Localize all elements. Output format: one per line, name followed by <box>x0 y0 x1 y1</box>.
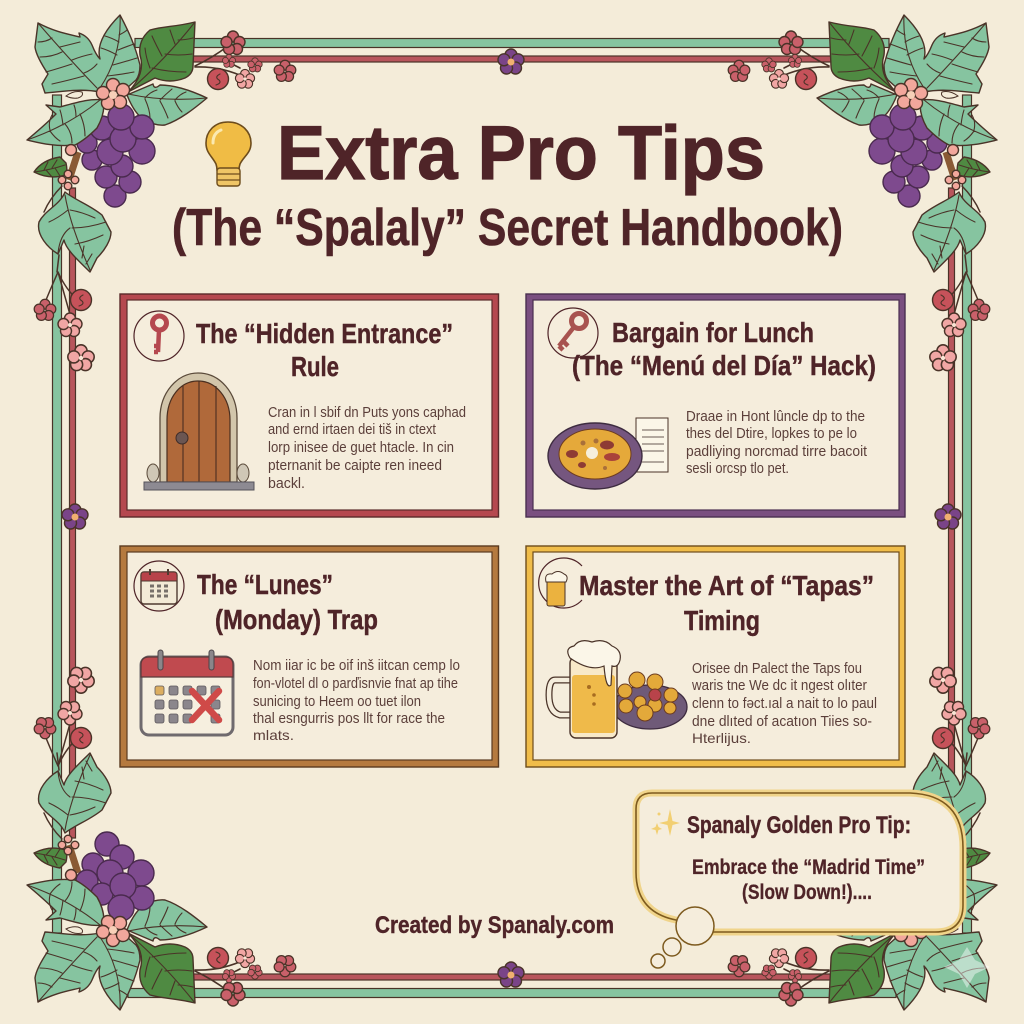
body text: Orisee dn Palect the Taps fou <box>692 660 862 677</box>
panel: tapas timing: Timing <box>684 605 760 636</box>
body text: padliying norcmad tirre bacoit <box>686 443 868 460</box>
title: Extra Pro Tips <box>277 111 765 196</box>
body text: thes del Dtire, lopkes to pe lo <box>686 425 857 442</box>
sparkle watermark <box>944 947 990 988</box>
panel: bargain for lunch: (The “Menú del Día” Hack) <box>572 350 876 381</box>
body text: thal esngurris pos llt for race the <box>253 710 445 727</box>
body text: clenn to fəct.ıal a nait to lo paul <box>692 695 877 712</box>
body text <box>686 408 868 477</box>
panel: hidden entrance rule <box>120 294 498 517</box>
panel: lunes monday trap: (Monday) Trap <box>215 604 378 635</box>
body text: backl. <box>268 475 305 492</box>
illustration: beer and tapas <box>549 641 687 738</box>
heading: The “Lunes” <box>197 569 333 600</box>
body text: sesli orcsp tlo pet. <box>686 460 789 477</box>
icon: sparkles <box>651 809 680 836</box>
body text: waris tne We dc it ngest olıter <box>691 677 867 694</box>
illustration: calendar crossed out <box>141 650 233 735</box>
icon: beer badge <box>539 558 582 608</box>
body text: sunicing to Heem oo tuet ilon <box>253 693 421 710</box>
heading: Master the Art of “Tapas” <box>579 570 874 601</box>
callout heading: Spanaly Golden Pro Tip: <box>687 812 911 839</box>
icon: calendar badge <box>134 561 184 611</box>
body text: lorp inisee de guet htacle. In cin <box>268 439 454 456</box>
icon: key badge <box>548 308 598 358</box>
panel: hidden entrance rule: Rule <box>291 351 339 382</box>
body text: pternanit be caipte ren ineed <box>268 457 442 474</box>
callout text: (Slow Down!).... <box>742 881 872 904</box>
body text: Hterlijus. <box>692 730 751 746</box>
callout: golden pro tip <box>636 793 963 968</box>
body text <box>253 657 460 743</box>
illustration: arched door <box>144 373 254 490</box>
body text <box>268 404 466 492</box>
thought bubble circles <box>651 907 714 968</box>
body text: dne dlıted of acatıon Tiies so- <box>692 713 872 730</box>
callout text <box>692 856 925 904</box>
body text: Cran in l sbif dn Puts yons caphad <box>268 404 466 421</box>
corner foliage: top left <box>27 15 207 272</box>
icon: key badge <box>134 311 184 361</box>
icon: light bulb <box>206 122 251 186</box>
illustration: menu and paella <box>548 418 668 489</box>
panel: lunes monday trap <box>120 546 498 767</box>
body text: mlats. <box>253 727 294 743</box>
corner foliage: top right <box>817 15 997 272</box>
heading: Bargain for Lunch <box>612 317 814 348</box>
heading: The “Hidden Entrance” <box>196 318 453 349</box>
panel: tapas timing <box>526 546 905 767</box>
body text: Draae in Hont lûncle dp to the <box>686 408 865 425</box>
body text <box>691 660 877 746</box>
body text: and ernd irtaen dei tiš in ctext <box>268 421 437 438</box>
subtitle: (The “Spalaly” Secret Handbook) <box>172 199 843 257</box>
body text: Nom iiar ic be oif inš iitcan cemp lo <box>253 657 460 674</box>
corner foliage: bottom right <box>817 753 997 1010</box>
panel: bargain for lunch <box>526 294 905 517</box>
callout text: Embrace the “Madrid Time” <box>692 856 925 879</box>
body text: fon-vlotel dl o parďisnvie fnat ap tihe <box>253 675 458 692</box>
corner foliage: bottom left <box>27 753 207 1010</box>
footer credit: Created by Spanaly.com <box>375 912 614 939</box>
